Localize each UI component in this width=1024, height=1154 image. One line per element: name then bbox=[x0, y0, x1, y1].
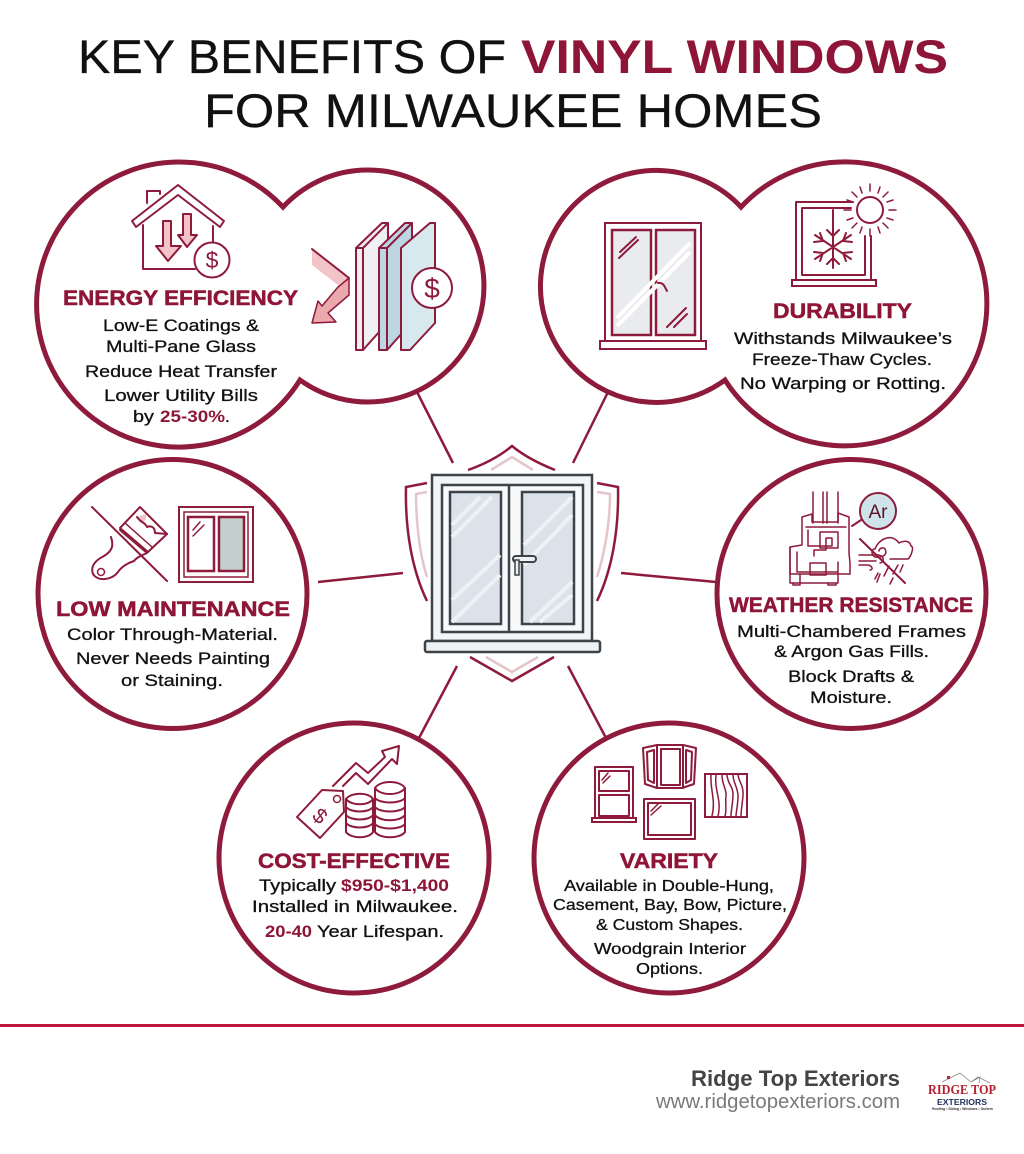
text: durability body: Withstands Milwaukee’s bbox=[734, 329, 952, 348]
footer divider bbox=[0, 1024, 1024, 1027]
text: cost-effective body: $950-$1,400 bbox=[341, 876, 449, 895]
footer company name and url: Ridge Top Exteriors bbox=[691, 1066, 900, 1091]
text: energy efficiency body: 25-30% bbox=[160, 407, 225, 426]
text: low maintenance body: Color Through-Material. bbox=[67, 625, 278, 644]
logo: ridge top exteriors bbox=[928, 1073, 996, 1111]
connector lines bbox=[318, 392, 716, 738]
title: KEY BENEFITS OF bbox=[78, 30, 506, 83]
central shield and window bbox=[406, 446, 618, 681]
text: energy efficiency body: by bbox=[133, 407, 155, 426]
icon: multi-chambered frame section bbox=[790, 492, 850, 585]
icon: argon gas circle: Ar bbox=[868, 502, 888, 523]
shield outline bbox=[406, 446, 618, 681]
panel: variety bbox=[534, 723, 804, 993]
heading: cost-effective: COST-EFFECTIVE bbox=[258, 850, 450, 873]
text: low maintenance body: or Staining. bbox=[121, 671, 223, 690]
text: variety body: & Custom Shapes. bbox=[596, 917, 743, 934]
text: weather resistance body: Moisture. bbox=[810, 688, 892, 707]
heading: low maintenance: LOW MAINTENANCE bbox=[56, 598, 290, 621]
text: weather resistance body: Block Drafts & bbox=[788, 667, 915, 686]
text: variety body bbox=[553, 878, 787, 978]
panel: energy efficiency bbox=[37, 162, 484, 447]
footer company name and url bbox=[655, 1066, 900, 1113]
text: cost-effective body: Installed in Milwaukee. bbox=[252, 897, 458, 916]
text: energy efficiency body: Low-E Coatings & bbox=[103, 316, 260, 335]
text: cost-effective body: Year Lifespan. bbox=[317, 922, 444, 941]
icon: multi-pane glass with deflected heat arrow bbox=[312, 223, 452, 350]
heading: variety: VARIETY bbox=[620, 850, 718, 873]
text: durability body: Freeze-Thaw Cycles. bbox=[752, 350, 932, 369]
logo: ridge top exteriors: RIDGE TOP bbox=[928, 1083, 996, 1098]
panel: weather resistance bbox=[717, 460, 986, 728]
text: cost-effective body: 20-40 bbox=[265, 922, 312, 941]
text: weather resistance body: Multi-Chambered Frames bbox=[737, 622, 966, 641]
icon: multi-pane glass with deflected heat arrow: $ bbox=[424, 273, 440, 304]
heading: energy efficiency: ENERGY EFFICIENCY bbox=[63, 287, 298, 310]
text: cost-effective body: Typically bbox=[259, 876, 337, 895]
footer company name and url: www.ridgetopexteriors.com bbox=[655, 1091, 900, 1113]
text: weather resistance body: & Argon Gas Fills. bbox=[774, 642, 929, 661]
icon: crossed out paint brush bbox=[92, 507, 167, 581]
icon: house with falling arrows and dollar: $ bbox=[206, 247, 219, 273]
heading: durability: DURABILITY bbox=[773, 300, 912, 323]
icon: price tag, coins and rising arrow: $ bbox=[308, 804, 332, 829]
panel: durability bbox=[540, 162, 987, 446]
text: durability body bbox=[734, 329, 952, 393]
text: energy efficiency body: Reduce Heat Transfer bbox=[85, 362, 277, 381]
text: energy efficiency body: Multi-Pane Glass bbox=[106, 337, 256, 356]
logo: ridge top exteriors: EXTERIORS bbox=[937, 1098, 988, 1107]
panel: low maintenance bbox=[38, 460, 307, 728]
panel: cost-effective bbox=[219, 723, 489, 993]
logo: ridge top exteriors: Roofing • Siding • Windows • Gutters bbox=[932, 1107, 993, 1111]
title: FOR MILWAUKEE HOMES bbox=[204, 84, 822, 137]
text: energy efficiency body: Lower Utility Bills bbox=[104, 386, 258, 405]
text: variety body: Woodgrain Interior bbox=[594, 941, 747, 958]
title: VINYL WINDOWS bbox=[521, 30, 948, 83]
text: variety body: Options. bbox=[636, 961, 703, 978]
text: variety body: Available in Double-Hung, bbox=[564, 878, 774, 895]
icon: argon gas circle bbox=[852, 493, 896, 529]
icon: house with falling arrows and dollar bbox=[132, 185, 230, 278]
icon: double window bbox=[600, 223, 706, 349]
title bbox=[78, 30, 948, 137]
text: energy efficiency body bbox=[85, 316, 277, 426]
text: energy efficiency body: . bbox=[225, 407, 230, 426]
icon: crossed-out wind and rain bbox=[859, 538, 913, 584]
text: variety body: Casement, Bay, Bow, Picture, bbox=[553, 897, 787, 914]
heading: weather resistance: WEATHER RESISTANCE bbox=[729, 594, 973, 617]
text: cost-effective body bbox=[252, 876, 458, 941]
window frame bbox=[425, 475, 600, 652]
text: durability body: No Warping or Rotting. bbox=[740, 374, 946, 393]
icon: window styles and woodgrain bbox=[592, 745, 747, 839]
text: low maintenance body: Never Needs Painting bbox=[76, 649, 270, 668]
icon: window with snowflake and sun bbox=[792, 184, 896, 286]
icon: price tag, coins and rising arrow bbox=[297, 746, 405, 838]
text: weather resistance body bbox=[737, 622, 966, 707]
text: low maintenance body bbox=[67, 625, 278, 690]
icon: low-maintenance window bbox=[179, 507, 253, 582]
